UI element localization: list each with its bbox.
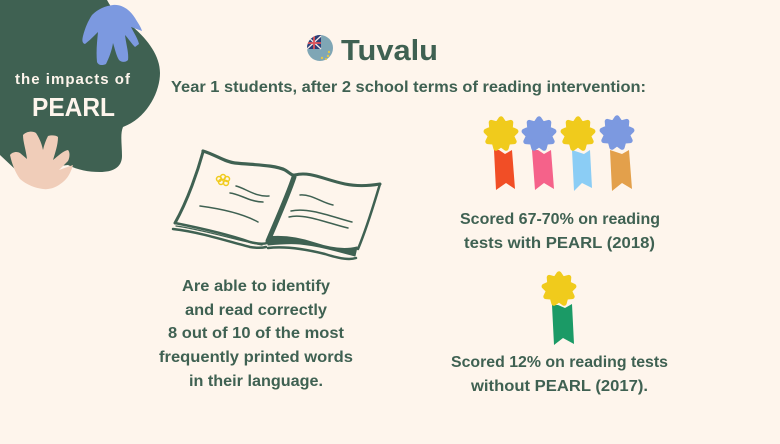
text: identify and read words xyxy=(159,278,353,390)
badges: four rosettes with PEARL 2018 xyxy=(486,118,632,191)
rosette: yellow 2 xyxy=(563,119,593,148)
ribbon: pink xyxy=(532,150,554,190)
text: identify and read words: frequently printed words xyxy=(159,349,353,366)
icon: open book xyxy=(173,151,380,259)
ribbon: red xyxy=(494,150,515,190)
ribbon: light blue xyxy=(572,150,592,191)
text: scored 67-70% with PEARL: tests with PEARL (2018) xyxy=(464,235,655,252)
text: scored 67-70% with PEARL: Scored 67-70% on reading xyxy=(460,211,660,228)
subtitle: Year 1 students: Year 1 students, after 2 school terms of reading intervention: xyxy=(171,79,646,96)
text: identify and read words: 8 out of 10 of the most xyxy=(168,325,344,342)
text: scored 12% without PEARL: Scored 12% on reading tests xyxy=(451,354,668,371)
badge: single rosette without PEARL 2017 xyxy=(544,274,574,345)
ribbon: orange xyxy=(610,150,632,191)
text: scored 67-70% with PEARL xyxy=(460,211,660,252)
rosette: blue 1 xyxy=(524,119,554,148)
ribbon: green xyxy=(552,304,574,345)
text: identify and read words: and read correctly xyxy=(185,302,327,319)
icon: Tuvalu flag xyxy=(307,35,333,61)
rosette: yellow xyxy=(544,274,574,303)
icon: peach hand xyxy=(10,132,73,189)
heading: the impacts of: the impacts of xyxy=(15,71,131,88)
text: scored 12% without PEARL: without PEARL (2017). xyxy=(470,378,648,395)
panel: the impacts of PEARL blob xyxy=(0,0,160,189)
icon: yellow flower xyxy=(216,174,230,186)
icon: blue hand xyxy=(82,5,142,65)
heading: PEARL: PEARL xyxy=(32,92,115,122)
text: identify and read words: Are able to identify xyxy=(182,278,330,295)
title: Tuvalu: Tuvalu xyxy=(341,35,438,67)
text: identify and read words: in their language. xyxy=(189,373,323,390)
rosette: yellow 1 xyxy=(486,119,516,148)
text: scored 12% without PEARL xyxy=(451,354,668,395)
rosette: blue 2 xyxy=(602,118,632,147)
